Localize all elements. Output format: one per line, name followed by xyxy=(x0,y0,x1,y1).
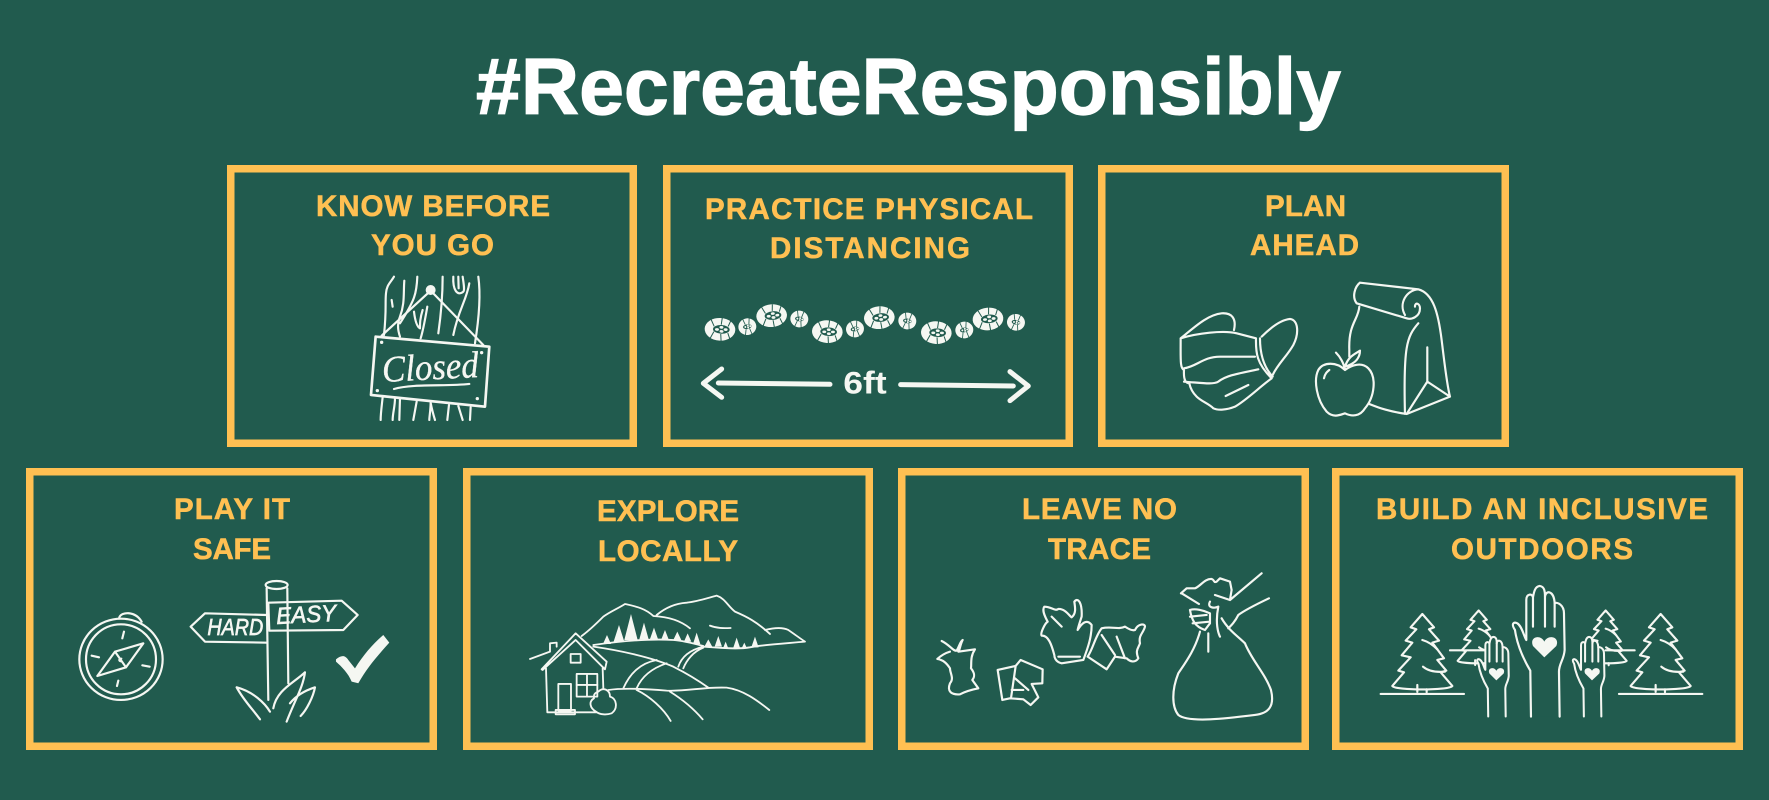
heading: play it safe: SAFE xyxy=(193,533,271,566)
heading: play it safe: PLAY IT xyxy=(174,493,290,526)
panel: build an inclusive outdoors xyxy=(1336,472,1739,746)
icon: house xyxy=(530,633,616,714)
icon: paper bag xyxy=(1349,283,1450,414)
icon: compass xyxy=(79,613,163,700)
icon: mask xyxy=(1181,313,1297,410)
panel: practice physical distancing xyxy=(667,169,1069,443)
heading: explore locally: EXPLORE xyxy=(597,495,739,528)
icon: trail sign: HARD xyxy=(207,614,263,640)
heading: know before you go: KNOW BEFORE xyxy=(316,190,550,223)
heading: practice physical distancing: DISTANCING xyxy=(770,232,970,265)
heading: build an inclusive outdoors: BUILD AN INCLUSIVE xyxy=(1376,493,1708,526)
heading: explore locally xyxy=(597,495,739,568)
icon: apple xyxy=(1316,351,1374,416)
icon: trash bag in hand xyxy=(1173,573,1272,720)
heading: leave no trace: LEAVE NO xyxy=(1022,493,1177,526)
arrow: six feet xyxy=(703,364,1028,401)
icon: trail sign xyxy=(191,581,358,722)
heading: play it safe xyxy=(174,493,290,566)
icon: trail sign: EASY xyxy=(276,600,338,629)
heading: plan ahead xyxy=(1250,190,1359,262)
panel: explore locally xyxy=(467,472,869,746)
icon: closed sign on trees: Closed xyxy=(381,345,480,391)
heading: know before you go xyxy=(316,190,550,262)
heading: practice physical distancing: PRACTICE PHYSICAL xyxy=(705,193,1033,226)
heading: build an inclusive outdoors xyxy=(1376,493,1708,566)
heading: build an inclusive outdoors: OUTDOORS xyxy=(1451,533,1633,566)
icon: trees xyxy=(1381,610,1702,694)
icon: check mark xyxy=(336,635,389,683)
icon: mountains and hills xyxy=(582,596,805,721)
heading: explore locally: LOCALLY xyxy=(598,535,738,568)
icon: wrappers xyxy=(998,660,1043,705)
heading: plan ahead: PLAN xyxy=(1265,190,1346,223)
icon: gloves xyxy=(1041,600,1145,669)
icon: closed sign on trees xyxy=(371,277,489,420)
panel: know before you go xyxy=(231,169,633,443)
title: #RecreateResponsibly xyxy=(476,42,1342,131)
heading: practice physical distancing xyxy=(705,193,1033,265)
icon: raised hands with hearts xyxy=(1477,586,1604,717)
icon: footprints xyxy=(704,303,1026,345)
panel: plan ahead xyxy=(1102,169,1505,443)
heading: leave no trace xyxy=(1022,493,1177,566)
heading: know before you go: YOU GO xyxy=(371,229,494,262)
icon: apple core xyxy=(937,640,978,694)
panel: leave no trace xyxy=(902,472,1305,746)
arrow: six feet: 6ft xyxy=(843,364,887,400)
heading: plan ahead: AHEAD xyxy=(1250,229,1359,262)
heading: leave no trace: TRACE xyxy=(1048,533,1151,566)
panel: play it safe xyxy=(30,472,433,746)
